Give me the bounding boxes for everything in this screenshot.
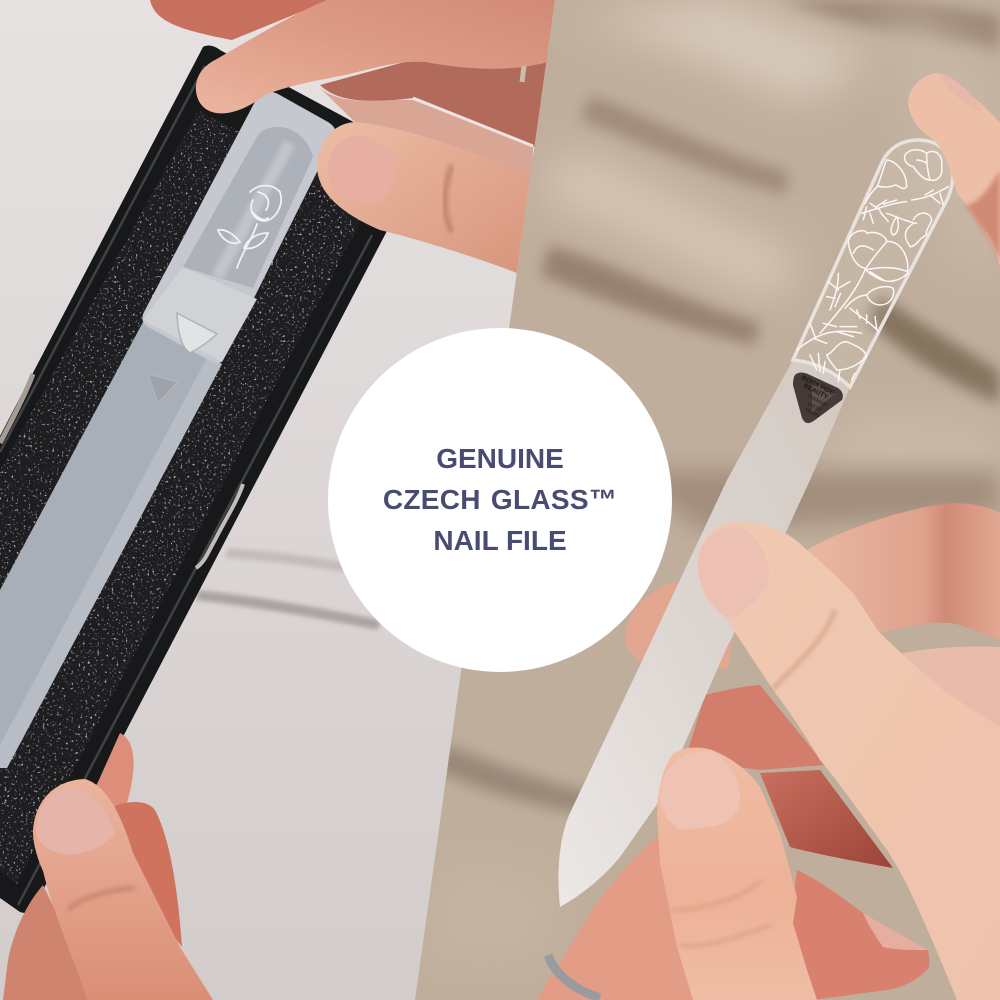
hand: top right finger — [908, 73, 1000, 267]
thumb crease — [670, 880, 770, 946]
thumb nail — [36, 788, 115, 855]
dark middle finger — [320, 55, 548, 147]
pale middle finger — [320, 88, 533, 182]
thumb nail — [328, 136, 397, 202]
engraved floral pattern — [797, 150, 948, 382]
large index finger — [698, 522, 1000, 1000]
sleeve inner window — [183, 127, 313, 288]
third rear finger — [685, 685, 825, 770]
fourth rear finger — [760, 770, 893, 868]
rear left of hand — [3, 885, 95, 1000]
ring sliver — [522, 66, 524, 82]
clear protective sleeve — [142, 91, 336, 363]
hand: fingers behind floral file — [625, 503, 1000, 868]
rose nail file in case — [0, 91, 336, 768]
nail — [938, 73, 983, 113]
clear glass top — [793, 140, 953, 387]
speckled foam — [0, 110, 372, 884]
emblem on file — [148, 374, 178, 403]
index nail — [698, 527, 769, 618]
title text: GENUINE — [436, 443, 564, 474]
title text: NAIL FILE — [433, 525, 567, 556]
knuckle crease — [772, 610, 835, 690]
thumb nail — [660, 751, 740, 830]
thumb — [317, 122, 530, 273]
lower right finger — [780, 870, 929, 1000]
brand emblem: PREMIUM — [807, 394, 829, 408]
title text: CZECH GLASS™ — [383, 484, 617, 515]
thumb — [657, 748, 817, 1000]
box side clasp right — [196, 484, 243, 568]
title text — [383, 443, 617, 556]
box rim highlights — [0, 66, 372, 905]
brand emblem: BONA FIDE — [800, 374, 836, 397]
second rear finger — [895, 647, 1000, 727]
lower left finger — [537, 837, 700, 1000]
brand emblem: CZECH — [807, 401, 823, 412]
rear finger — [115, 802, 182, 947]
right background — [400, 0, 1000, 1000]
upper rear finger — [807, 503, 1000, 640]
rear finger tip — [88, 733, 134, 825]
knuckle crease — [68, 888, 135, 910]
silver ring — [548, 955, 600, 998]
hand: top left holding box — [150, 0, 560, 273]
gap highlight — [413, 98, 533, 146]
thumb — [33, 779, 213, 1000]
frosted file — [0, 322, 222, 768]
box frame — [0, 46, 424, 913]
box side clasp left — [0, 374, 33, 443]
lower right nail — [863, 913, 928, 950]
black presentation box — [0, 46, 424, 913]
floral glass nail file — [558, 140, 953, 907]
index finger — [196, 0, 560, 113]
frosted file body — [558, 360, 850, 907]
left background — [0, 0, 560, 1000]
sleeve window highlight — [217, 143, 290, 277]
finger shadow — [965, 170, 1000, 262]
center circle label — [328, 328, 672, 672]
emblem on sleeve — [177, 313, 217, 353]
engraved rose — [218, 186, 281, 268]
brand emblem: BEAUTY — [802, 382, 830, 401]
hand: bottom left holding box — [3, 733, 213, 1000]
sleeve band — [143, 267, 257, 362]
top rear finger — [150, 0, 330, 40]
hand: bottom right fingers — [537, 522, 1000, 1000]
brand emblem: GLASS — [805, 407, 821, 418]
file lighter edge — [0, 356, 222, 768]
rear finger left stub — [625, 580, 740, 672]
brand emblem — [793, 372, 843, 423]
thumb crease — [445, 165, 452, 232]
